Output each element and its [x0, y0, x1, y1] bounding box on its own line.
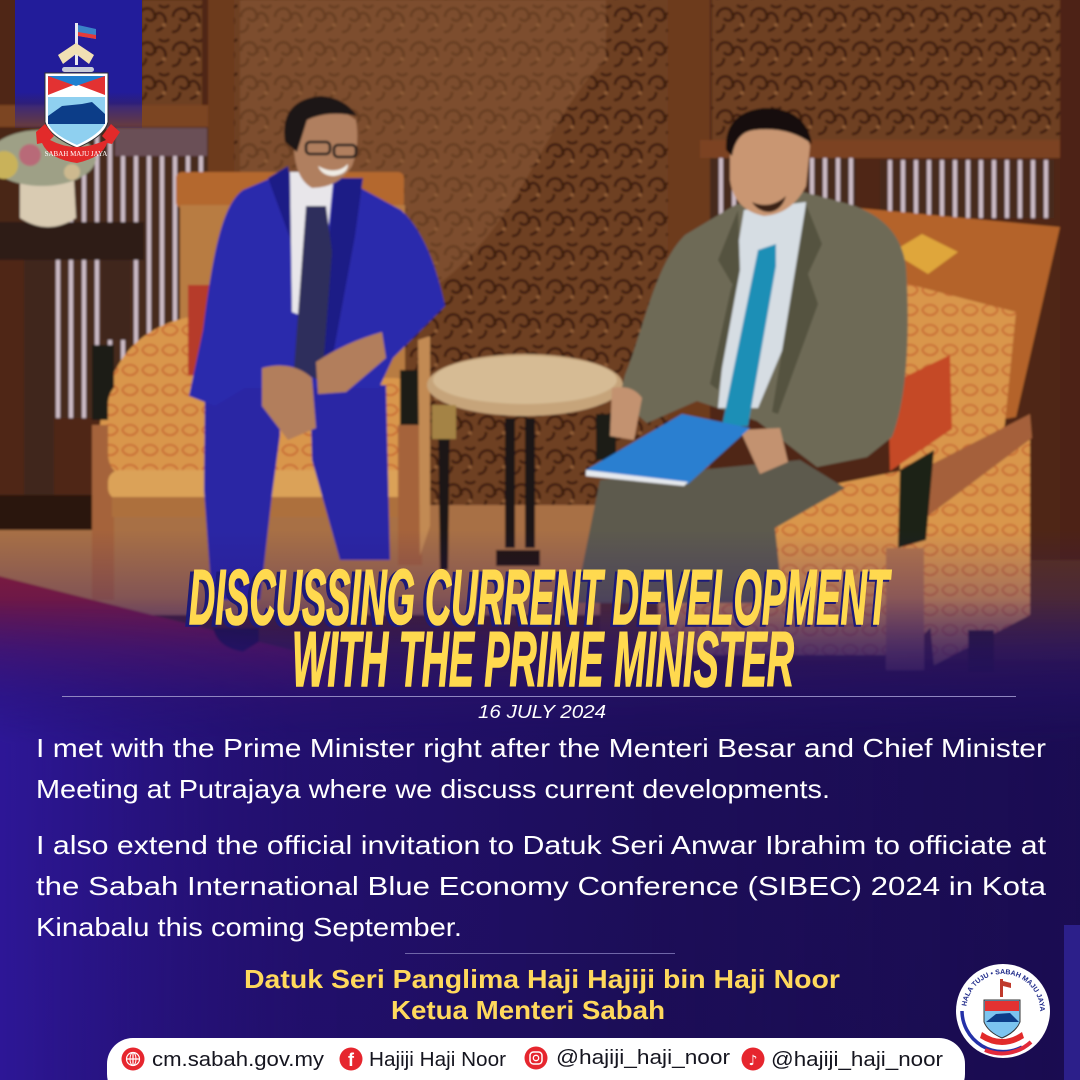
icon: tiktok: ♪ [749, 1053, 757, 1069]
logo flag and crest [1000, 979, 1011, 997]
signature: Datuk Seri Panglima Haji Hajiji bin Haji Noor [244, 964, 840, 994]
body paragraph 2 [36, 830, 1047, 942]
body paragraph 2: I also extend the official invitation to Datuk Seri Anwar Ibrahim to officiate at [36, 830, 1047, 860]
icon: Sabah coat of arms [36, 23, 120, 163]
carpet [0, 575, 330, 815]
round logo: Hala Tuju Sabah Maju Jaya [956, 964, 1050, 1058]
flag [75, 23, 96, 65]
crest hands [58, 43, 94, 64]
icon: tiktok [742, 1048, 764, 1070]
logo mountain [986, 1013, 1019, 1022]
man on the right [575, 108, 908, 603]
logo ribbon [980, 1032, 1024, 1045]
round marble table [427, 354, 623, 570]
body paragraph 1: Meeting at Putrajaya where we discuss current developments. [36, 774, 830, 804]
side table and vase [0, 130, 144, 530]
motto ribbon: SABAH MAJU JAYA [45, 150, 107, 158]
logo ring text: HALA TUJU • SABAH MAJU JAYA [962, 969, 1045, 1012]
signature: Ketua Menteri Sabah [391, 995, 665, 1025]
social: website: cm.sabah.gov.my [152, 1049, 324, 1071]
icon: facebook [340, 1048, 362, 1070]
social: tiktok: @hajiji_haji_noor [771, 1049, 943, 1071]
purple gradient overlay [0, 530, 1080, 1080]
left armchair [92, 172, 430, 600]
carved central panel [232, 0, 668, 530]
man on the left [189, 96, 445, 652]
body paragraph 1 [36, 733, 1046, 804]
carved panel: top left [142, 0, 202, 108]
calligraphy panel [240, 0, 606, 294]
title [185, 553, 892, 703]
wooden pillars [208, 0, 710, 540]
shield [45, 73, 108, 148]
white social media bar [107, 1038, 965, 1080]
carved panel: top right [712, 0, 1062, 140]
body paragraph 2: the Sabah International Blue Economy Conference (SIBEC) 2024 in Kota [36, 871, 1047, 901]
logo shield [984, 1000, 1020, 1038]
body paragraph 1: I met with the Prime Minister right after the Menteri Besar and Chief Minister [36, 733, 1046, 763]
icon: facebook: f [348, 1050, 355, 1070]
icon: globe [122, 1048, 144, 1070]
logo shield band [985, 1001, 1019, 1011]
signature [244, 964, 840, 1025]
horizontal rule [62, 696, 1016, 697]
bright strip: bottom right [1064, 925, 1080, 1080]
right wall frame and lattice [700, 0, 1080, 645]
window lattice: left [0, 105, 208, 418]
icon: instagram [524, 1046, 548, 1070]
wreath [62, 67, 94, 72]
short divider [405, 953, 675, 954]
side tint overlay [0, 600, 1080, 1080]
social: facebook: Hajiji Haji Noor [369, 1049, 506, 1071]
date: 16 JULY 2024 [478, 702, 606, 722]
body paragraph 2: Kinabalu this coming September. [36, 912, 462, 942]
wood floor [0, 505, 600, 615]
wooden wall background [0, 0, 1080, 815]
top-left blue banner [15, 0, 142, 128]
right armchair [596, 205, 1060, 672]
social: instagram: @hajiji_haji_noor [556, 1047, 730, 1069]
photo: meeting room with two men seated [0, 0, 1080, 815]
